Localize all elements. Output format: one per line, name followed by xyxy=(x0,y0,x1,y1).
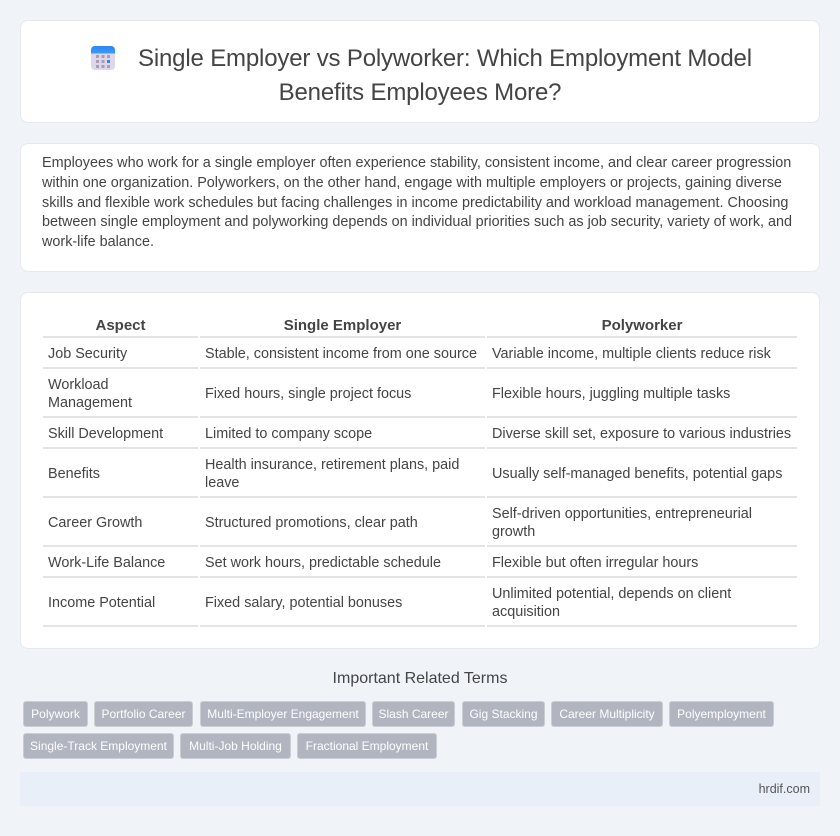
text: introduction paragraph: within one organization. Polyworkers, on the other hand, engage with multiple employers or projects, gaining diverse xyxy=(42,175,782,191)
table: comparison: Fixed hours, single project focus xyxy=(205,386,411,402)
table: comparison: Set work hours, predictable schedule xyxy=(205,555,441,571)
text: introduction paragraph: between single employment and polyworking depends on individual priorities such as job security, variety of work, and xyxy=(42,214,792,230)
text: introduction paragraph: skills and flexible work schedules but facing challenges in income predictability and workload management. Choosing xyxy=(42,195,788,211)
table: comparison: Structured promotions, clear path xyxy=(205,515,418,531)
tags: related terms: Polywork xyxy=(31,707,80,721)
text: source: hrdif.com xyxy=(759,782,810,796)
table: comparison: Skill Development xyxy=(48,426,163,442)
tags: related terms: Polyemployment xyxy=(677,707,766,721)
table: comparison: Flexible hours, juggling multiple tasks xyxy=(492,386,730,402)
tags: related terms: Gig Stacking xyxy=(469,707,538,721)
panel: comparison table xyxy=(20,292,820,649)
title: Benefits Employees More? xyxy=(279,79,561,106)
table: comparison: Workload xyxy=(48,377,109,393)
table: comparison: Stable, consistent income from one source xyxy=(205,346,477,362)
table: comparison: Work-Life Balance xyxy=(48,555,165,571)
panel: header xyxy=(20,20,820,123)
table: comparison: Career Growth xyxy=(48,515,142,531)
table: comparison: Variable income, multiple clients reduce risk xyxy=(492,346,771,362)
tags: related terms: Portfolio Career xyxy=(101,707,186,721)
table: comparison: Polyworker xyxy=(602,317,682,334)
text: introduction paragraph xyxy=(42,155,792,250)
tags: related terms xyxy=(23,701,774,759)
tags: related terms: Multi-Job Holding xyxy=(189,739,282,753)
title xyxy=(138,45,752,106)
table: comparison: growth xyxy=(492,524,535,540)
table: comparison xyxy=(43,317,797,627)
table: comparison: Limited to company scope xyxy=(205,426,372,442)
table: comparison: Single Employer xyxy=(284,317,401,334)
table: comparison: Income Potential xyxy=(48,595,155,611)
tags: related terms: Multi-Employer Engagement xyxy=(207,707,359,721)
tags: related terms: Fractional Employment xyxy=(306,739,428,753)
table: comparison: acquisition xyxy=(492,604,560,620)
table: comparison: Fixed salary, potential bonuses xyxy=(205,595,402,611)
footer xyxy=(20,772,820,806)
table: comparison: leave xyxy=(205,475,239,491)
table: comparison: Job Security xyxy=(48,346,127,362)
text: introduction paragraph: Employees who work for a single employer often experience stability, consistent income, and clear career progression xyxy=(42,155,791,171)
table: comparison: Self-driven opportunities, entrepreneurial xyxy=(492,506,752,522)
icon: calendar xyxy=(91,46,115,70)
table: comparison: Usually self-managed benefits, potential gaps xyxy=(492,466,782,482)
table: comparison: Unlimited potential, depends on client xyxy=(492,586,731,602)
title: Single Employer vs Polyworker: Which Employment Model xyxy=(138,45,752,72)
tags: related terms: Single-Track Employment xyxy=(30,739,167,753)
table: comparison: Aspect xyxy=(95,317,146,334)
tags: related terms: Career Multiplicity xyxy=(559,707,655,721)
text: introduction paragraph: work-life balance. xyxy=(42,234,154,250)
table: comparison: Benefits xyxy=(48,466,100,482)
table: comparison: Management xyxy=(48,395,132,411)
table: comparison: Diverse skill set, exposure to various industries xyxy=(492,426,791,442)
heading: related terms: Important Related Terms xyxy=(333,670,507,687)
table: comparison: Flexible but often irregular hours xyxy=(492,555,698,571)
tags: related terms: Slash Career xyxy=(378,707,449,721)
table: comparison: Health insurance, retirement plans, paid xyxy=(205,457,459,473)
panel: introduction xyxy=(20,143,820,272)
